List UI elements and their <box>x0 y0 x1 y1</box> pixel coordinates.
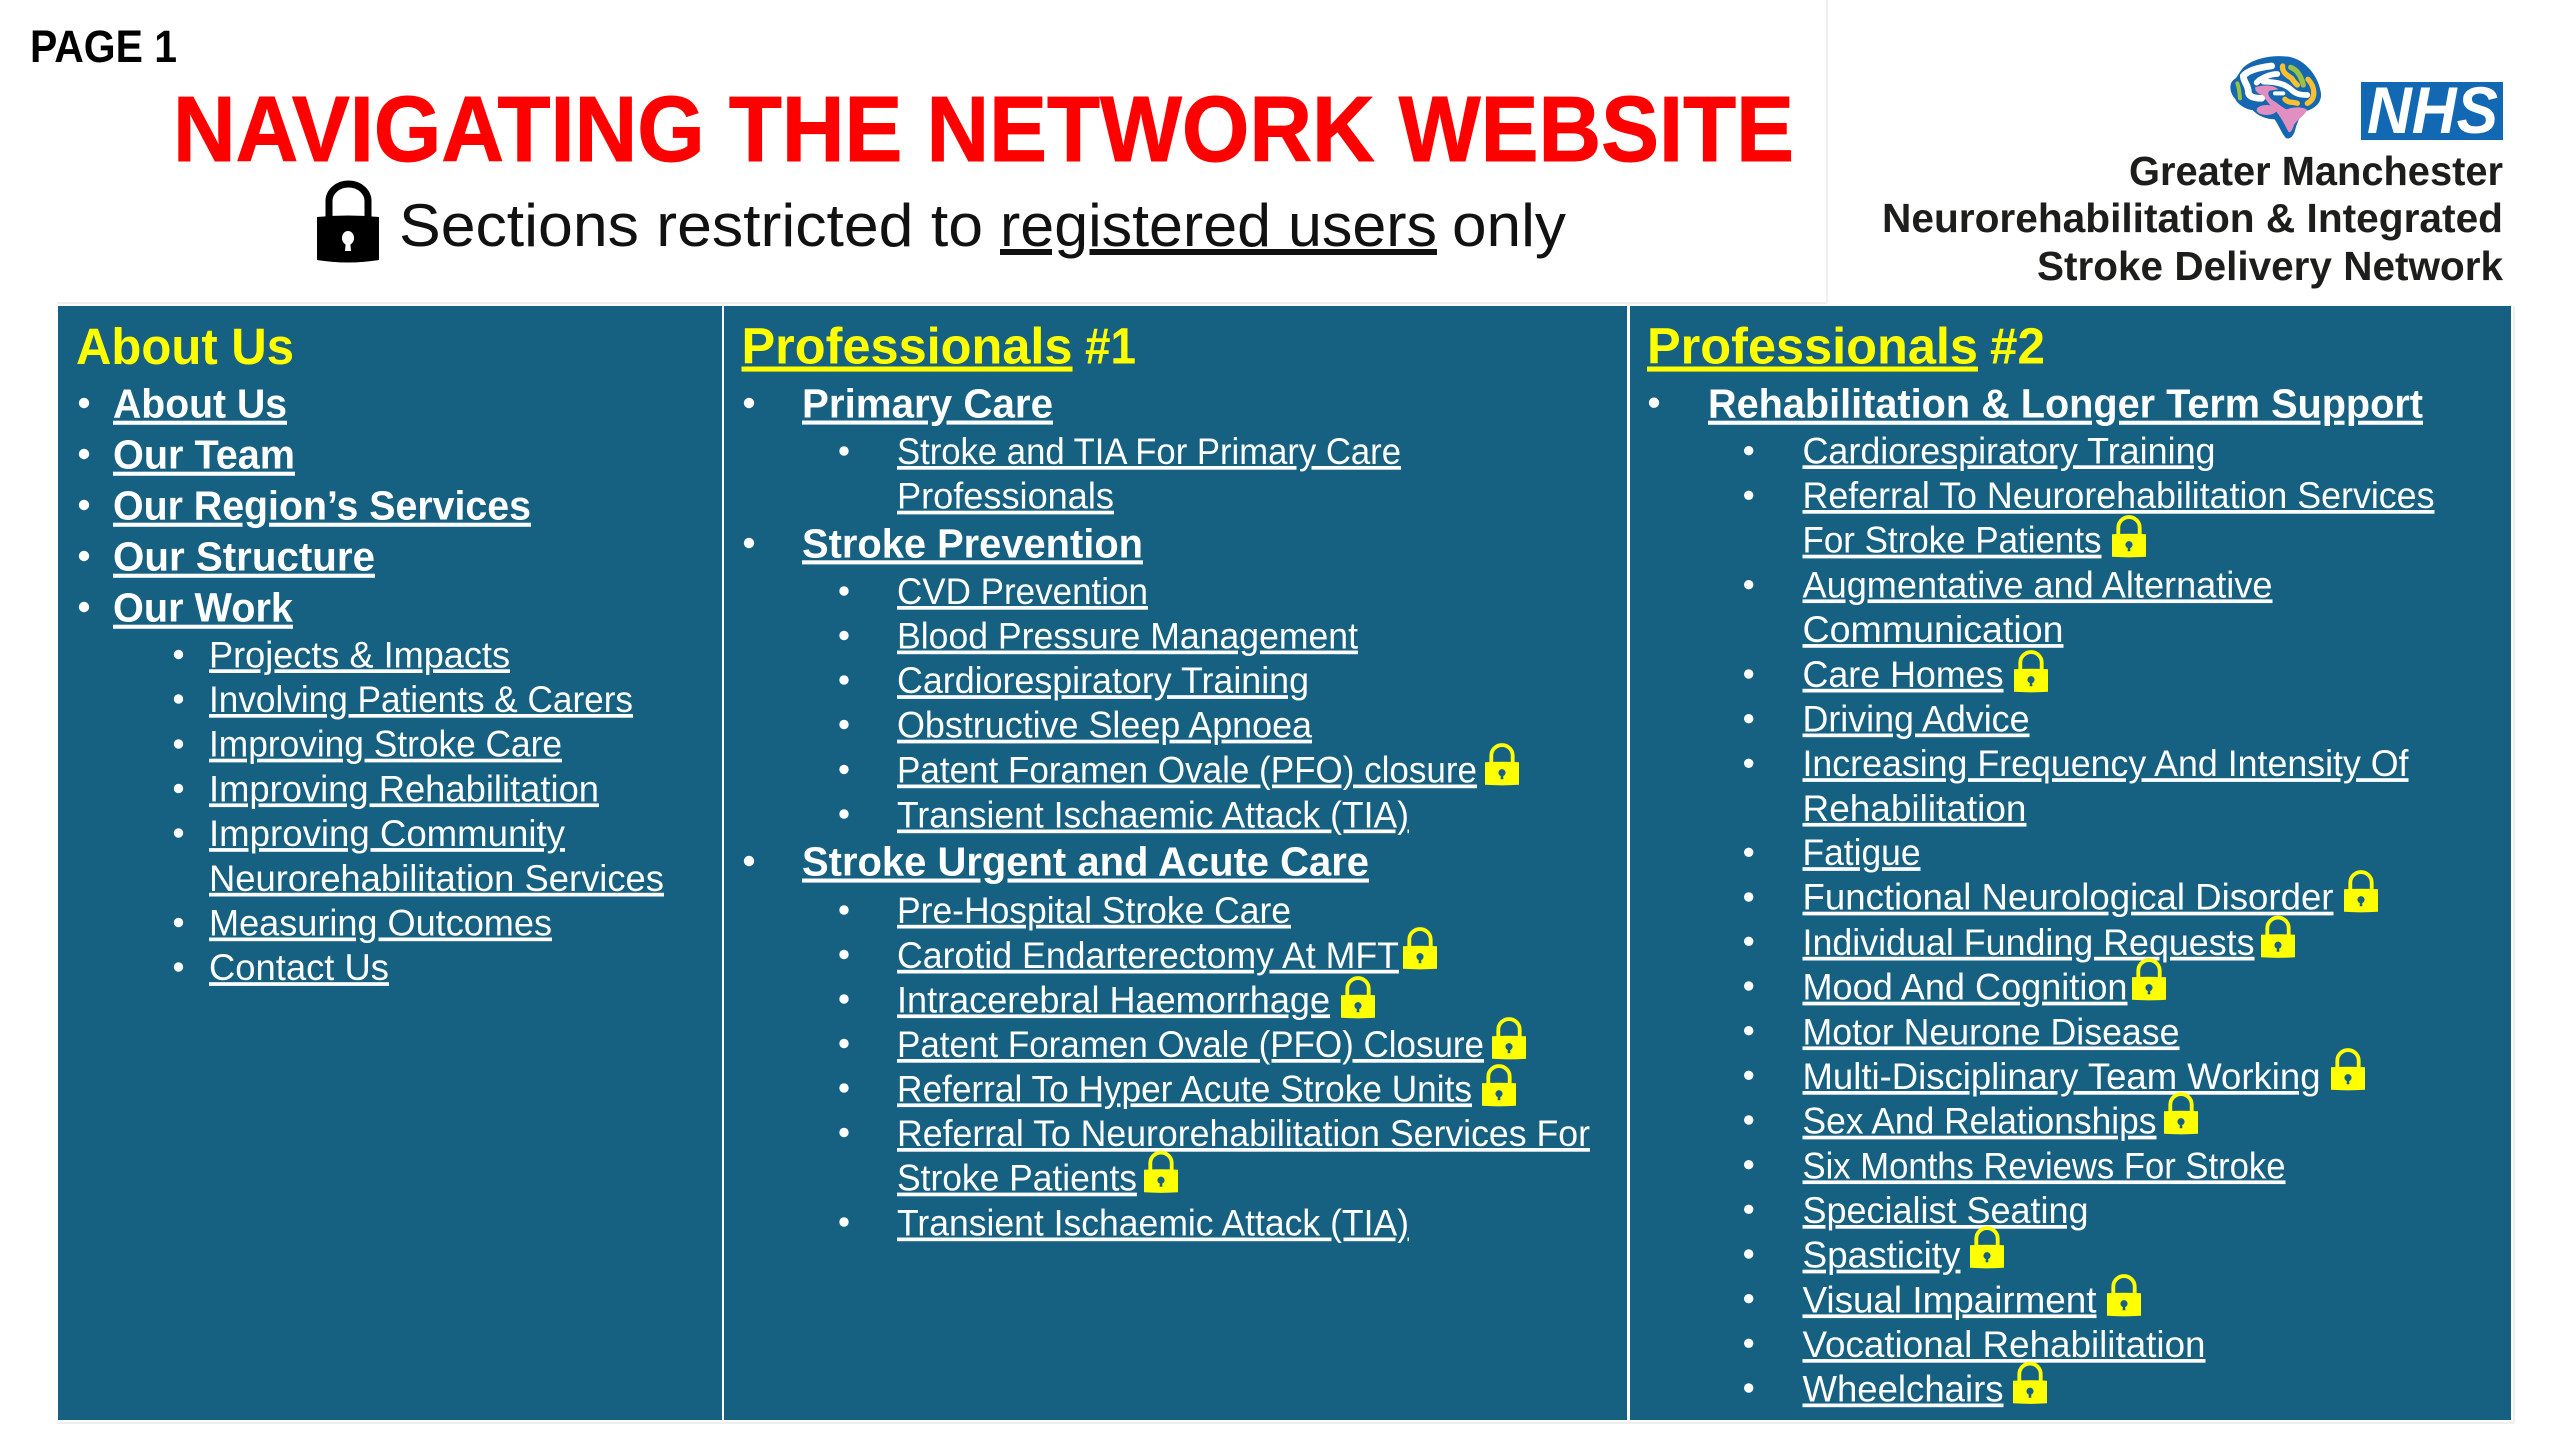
heading: professionals 1: #1 <box>1085 318 1136 374</box>
link: involving patients and carers: Involving Patients & Carers <box>209 679 633 720</box>
organisation name <box>1882 148 2503 289</box>
organisation name: Greater Manchester <box>2129 148 2503 194</box>
link: multi-disciplinary team working, restricted: Multi-Disciplinary Team Working <box>1802 1056 2320 1097</box>
link: transient ischaemic attack 2: Transient Ischaemic Attack (TIA) <box>897 1202 1409 1244</box>
link: referral to neurorehabilitation services, restricted: For Stroke Patients <box>1802 520 2102 561</box>
icon: black padlock <box>317 184 379 262</box>
subtitle: sections restricted to registered users only <box>399 192 1566 259</box>
link: patent foramen ovale closure, restricted: Patent Foramen Ovale (PFO) closure <box>897 750 1477 790</box>
panel: professionals 2 <box>1630 306 2511 1420</box>
link: visual impairment, restricted <box>1744 1276 2141 1320</box>
link: contact us: Contact Us <box>209 947 389 988</box>
link: improving community neurorehabilitation services <box>174 813 664 899</box>
link: mood and cognition, restricted: Mood And Cognition <box>1802 967 2128 1008</box>
link: rehabilitation and longer term support: Rehabilitation & Longer Term Support <box>1708 381 2423 427</box>
link: carotid endarterectomy, restricted: Carotid Endarterectomy At MFT <box>897 935 1399 976</box>
link: augmentative and alternative communication: Communication <box>1802 609 2064 650</box>
link: referral to neurorehabilitation services for stroke patients, restricted <box>839 1113 1590 1199</box>
link: specialist seating: Specialist Seating <box>1802 1190 2088 1231</box>
link: our structure: Our Structure <box>113 534 375 580</box>
link: increasing frequency and intensity of rehabilitation <box>1744 743 2409 829</box>
subtitle: sections restricted to registered users only: registered users <box>1000 192 1437 259</box>
subtitle: sections restricted to registered users only: Sections restricted to <box>399 192 983 259</box>
link: stroke and tia for primary care professionals: Professionals <box>897 476 1114 517</box>
link: transient ischaemic attack: Transient Ischaemic Attack (TIA) <box>897 794 1409 836</box>
link: care homes, restricted <box>1744 652 2048 695</box>
link: care homes, restricted: Care Homes <box>1802 654 2004 695</box>
link: our work: Our Work <box>113 585 293 631</box>
panel: about us <box>58 306 722 1420</box>
link: pre-hospital stroke care: Pre-Hospital Stroke Care <box>897 890 1291 931</box>
link: our team: Our Team <box>113 432 295 478</box>
link: our region's services: Our Region’s Services <box>113 483 531 529</box>
link: cardiorespiratory training: Cardiorespiratory Training <box>1802 430 2216 471</box>
link: stroke prevention: Stroke Prevention <box>802 520 1143 566</box>
heading: about us: About Us <box>76 318 294 375</box>
link: referral to hyper acute stroke units, restricted: Referral To Hyper Acute Stroke Units <box>897 1068 1472 1109</box>
link: stroke urgent and acute care: Stroke Urgent and Acute Care <box>802 838 1369 884</box>
link: obstructive sleep apnoea: Obstructive Sleep Apnoea <box>897 705 1312 746</box>
heading: professionals 2: #2 <box>1990 318 2045 374</box>
link: primary care: Primary Care <box>802 380 1053 426</box>
link: wheelchairs, restricted <box>1744 1364 2047 1410</box>
link: increasing frequency and intensity of rehabilitation: Rehabilitation <box>1802 788 2026 829</box>
logo: NHS: NHS <box>2367 73 2498 147</box>
link: about us: About Us <box>113 381 287 427</box>
logo: brain <box>2231 57 2320 137</box>
link: motor neurone disease: Motor Neurone Disease <box>1802 1011 2180 1052</box>
link: sex and relationships, restricted: Sex And Relationships <box>1802 1101 2156 1142</box>
link: improving rehabilitation: Improving Rehabilitation <box>209 768 599 809</box>
link: blood pressure management: Blood Pressure Management <box>897 616 1359 656</box>
page number label: PAGE 1 <box>30 21 177 72</box>
link: patent foramen ovale closure 2, restricted: Patent Foramen Ovale (PFO) Closure <box>897 1024 1484 1065</box>
link: visual impairment, restricted: Visual Impairment <box>1802 1279 2097 1320</box>
title: NAVIGATING THE NETWORK WEBSITE <box>173 77 1794 181</box>
heading: professionals 2: Professionals <box>1647 318 1978 374</box>
link: spasticity, restricted: Spasticity <box>1802 1235 1961 1276</box>
link: stroke and tia for primary care professionals <box>839 431 1401 517</box>
organisation name: Stroke Delivery Network <box>2037 243 2503 289</box>
link: referral to neurorehabilitation services, restricted: Referral To Neurorehabilitation Services <box>1802 475 2434 516</box>
link: stroke and tia for primary care professionals: Stroke and TIA For Primary Care <box>897 431 1401 472</box>
link: six months reviews for stroke: Six Months Reviews For Stroke <box>1802 1145 2286 1186</box>
link: individual funding requests, restricted: Individual Funding Requests <box>1802 922 2254 963</box>
link: fatigue: Fatigue <box>1802 832 1920 873</box>
link: improving stroke care: Improving Stroke Care <box>209 724 562 765</box>
link: mood and cognition, restricted <box>1744 960 2166 1008</box>
link: vocational rehabilitation: Vocational Rehabilitation <box>1802 1324 2206 1365</box>
link: improving community neurorehabilitation services: Neurorehabilitation Services <box>209 858 664 899</box>
link: referral to neurorehabilitation services, restricted <box>1744 475 2434 561</box>
panel: professionals 1 <box>724 306 1627 1420</box>
link: cvd prevention: CVD Prevention <box>897 571 1148 612</box>
link: driving advice: Driving Advice <box>1802 698 2030 740</box>
link: spasticity, restricted <box>1744 1228 2004 1276</box>
link: improving community neurorehabilitation services: Improving Community <box>209 813 565 854</box>
link: projects and impacts: Projects & Impacts <box>209 634 510 675</box>
link: fatigue <box>1744 832 1920 873</box>
link: augmentative and alternative communication: Augmentative and Alternative <box>1802 564 2272 605</box>
link: wheelchairs, restricted: Wheelchairs <box>1802 1368 2004 1410</box>
link: cardiorespiratory training: Cardiorespiratory Training <box>897 660 1309 701</box>
link: augmentative and alternative communication <box>1744 564 2272 650</box>
link: increasing frequency and intensity of rehabilitation: Increasing Frequency And Intensity Of <box>1802 743 2409 784</box>
subtitle: sections restricted to registered users only: only <box>1452 192 1566 259</box>
heading: professionals 1: Professionals <box>742 318 1072 374</box>
link: referral to neurorehabilitation services for stroke patients, restricted: Stroke Patients <box>897 1158 1137 1199</box>
link: functional neurological disorder, restricted: Functional Neurological Disorder <box>1802 877 2334 918</box>
link: intracerebral haemorrhage, restricted: Intracerebral Haemorrhage <box>897 979 1330 1020</box>
link: measuring outcomes: Measuring Outcomes <box>209 902 552 944</box>
link: referral to neurorehabilitation services for stroke patients, restricted: Referral To Neurorehabilitation Services For <box>897 1113 1590 1154</box>
organisation name: Neurorehabilitation & Integrated <box>1882 195 2503 241</box>
